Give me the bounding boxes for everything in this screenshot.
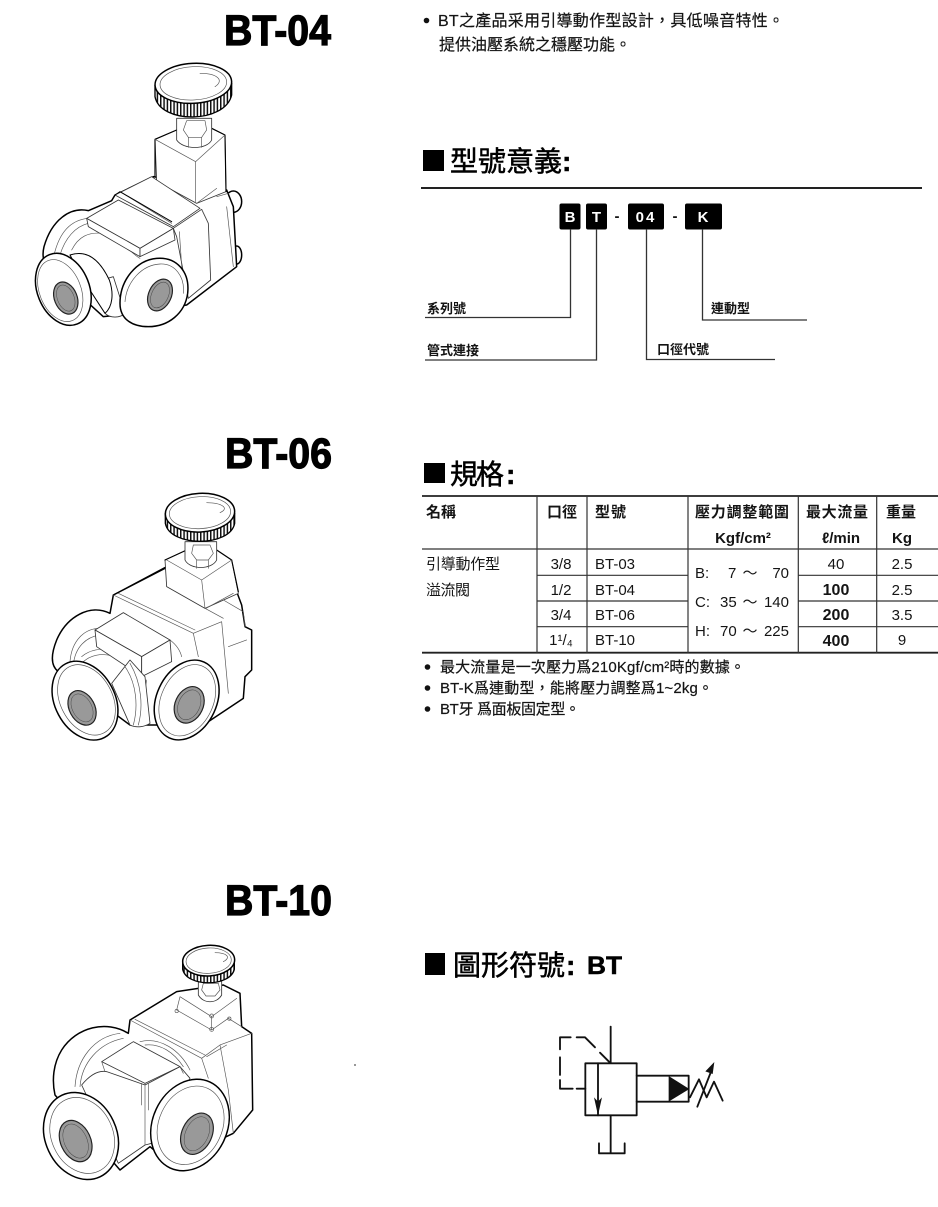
model column: BT-04 <box>595 582 635 599</box>
pressure range column: 7 <box>728 565 736 582</box>
pressure range column: 35 <box>720 594 737 611</box>
label: port size code: 口徑代號 <box>657 342 709 357</box>
check triangle <box>669 1076 689 1102</box>
weight column <box>892 556 912 649</box>
pressure range column: 70 <box>772 565 789 582</box>
name column: 引導動作型 <box>426 556 500 573</box>
name column <box>426 556 500 599</box>
pressure range column: ～ <box>742 565 758 582</box>
table header: 重量 <box>886 503 916 521</box>
table header: Kg <box>892 530 912 547</box>
illustration: BT-06 valve <box>39 492 252 752</box>
specification table <box>422 496 938 653</box>
heading: specifications: : <box>506 459 515 490</box>
port size column: 3/4 <box>551 607 571 624</box>
bullet text: product description: 提供油壓系統之穩壓功能。 <box>439 36 631 54</box>
pressure range column: 140 <box>764 594 789 611</box>
heading: graphic symbol: BT <box>587 952 622 980</box>
pressure range column: 70 <box>720 623 737 640</box>
port size column: 3/8 <box>551 556 571 573</box>
code boxes: T <box>592 209 601 226</box>
table header: 型號 <box>595 503 626 521</box>
table header: Kgf/cm² <box>715 530 771 547</box>
max flow column: 40 <box>828 556 844 573</box>
valve block <box>585 1063 637 1115</box>
heading: graphic symbol: 圖形符號 <box>453 950 565 981</box>
heading: model meaning: 型號意義 <box>450 146 562 177</box>
tank line <box>599 1116 625 1153</box>
code boxes: - <box>614 208 620 225</box>
max flow column: 200 <box>823 607 849 624</box>
port size column: 1¹/₄ <box>549 632 573 649</box>
label: linked type: 連動型 <box>711 301 750 316</box>
code boxes: K <box>698 209 709 226</box>
table header: ℓ/min <box>822 530 860 547</box>
port size column: 1/2 <box>551 582 571 599</box>
table grid <box>422 496 938 653</box>
pressure range column: ～ <box>742 623 758 640</box>
bullet text: product description <box>424 11 784 54</box>
title: BT-04: BT-04 <box>224 7 331 55</box>
dashed pilot line <box>560 1037 610 1089</box>
pressure range column: H: <box>695 623 710 640</box>
model column: BT-10 <box>595 632 635 649</box>
bullet text: product description: BT之產品采用引導動作型設計，具低噪音特性。 <box>438 11 784 30</box>
weight column: 2.5 <box>892 582 912 599</box>
max flow column: 400 <box>823 633 849 650</box>
weight column: 3.5 <box>892 607 912 624</box>
table notes: 最大流量是一次壓力爲210Kgf/cm²時的數據。 <box>440 659 745 676</box>
model column <box>595 556 635 649</box>
illustration: BT-10 valve <box>30 944 253 1192</box>
weight column: 9 <box>898 632 906 649</box>
heading: specifications: 規格 <box>450 459 504 490</box>
label: pipe connection: 管式連接 <box>427 343 479 358</box>
weight column: 2.5 <box>892 556 912 573</box>
max flow column: 100 <box>823 582 849 599</box>
adjustable spring <box>690 1079 723 1101</box>
code boxes: B <box>565 209 576 226</box>
code boxes: 04 <box>636 209 656 226</box>
pressure range column <box>695 565 789 640</box>
title: BT-10: BT-10 <box>225 877 332 925</box>
title: BT-06: BT-06 <box>225 430 332 478</box>
model code diagram <box>425 204 807 360</box>
adjust arrow <box>697 1062 714 1107</box>
table notes: BT-K爲連動型，能將壓力調整爲1~2kg。 <box>440 680 713 697</box>
illustration: BT-04 valve <box>25 61 242 334</box>
model column: BT-06 <box>595 607 635 624</box>
pressure line top <box>608 1027 613 1063</box>
hydraulic symbol <box>560 1027 723 1153</box>
table header: 名稱 <box>426 503 456 521</box>
code boxes <box>560 204 722 230</box>
table header <box>426 503 916 547</box>
model column: BT-03 <box>595 556 635 573</box>
code boxes: - <box>672 208 678 225</box>
name column: 溢流閥 <box>426 582 470 599</box>
stray dot <box>354 1064 356 1066</box>
internal arrow <box>594 1063 602 1115</box>
table header: 壓力調整範圍 <box>695 503 789 521</box>
table notes: BT牙 爲面板固定型。 <box>440 701 580 718</box>
spring housing <box>637 1076 689 1102</box>
pressure range column: ～ <box>742 594 758 611</box>
heading: specifications <box>424 459 515 490</box>
pressure range column: 225 <box>764 623 789 640</box>
pressure range column: B: <box>695 565 709 582</box>
port size column <box>549 556 573 649</box>
heading: model meaning: : <box>562 146 571 177</box>
table notes <box>425 659 745 718</box>
pressure range column: C: <box>695 594 710 611</box>
table header: 口徑 <box>547 504 577 521</box>
max flow column <box>823 556 849 650</box>
heading: graphic symbol: : <box>566 950 575 981</box>
label: series: 系列號 <box>427 301 466 316</box>
table header: 最大流量 <box>806 503 868 521</box>
heading: graphic symbol <box>425 950 622 981</box>
